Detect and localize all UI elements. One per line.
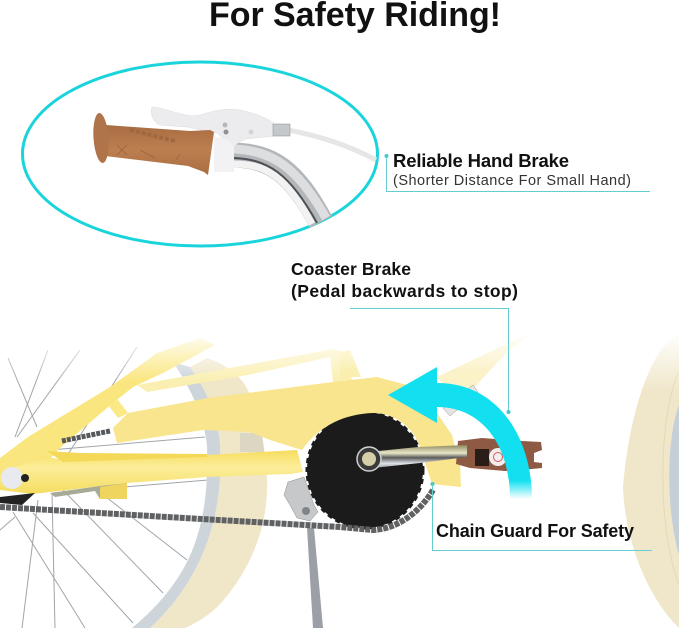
rear rim	[132, 362, 220, 628]
label: reliable hand brake	[384, 150, 650, 192]
label: chain guard: Chain Guard For Safety	[436, 521, 634, 541]
fade overlays	[0, 330, 340, 382]
cable	[288, 130, 376, 160]
handlebar	[230, 149, 326, 224]
black chainwheel	[307, 412, 423, 528]
upper guard bar	[137, 349, 352, 392]
seat stay	[0, 338, 215, 478]
grip	[105, 125, 214, 175]
chain stay tube	[0, 450, 303, 494]
front tire	[623, 335, 679, 628]
chain guard	[113, 377, 461, 487]
rear tire	[150, 358, 267, 628]
tire shadow	[240, 433, 264, 452]
chain	[0, 490, 433, 530]
lower chain	[62, 431, 110, 441]
label: coaster brake	[291, 259, 518, 301]
brake arm	[50, 483, 127, 499]
stand bracket	[284, 477, 318, 521]
label: reliable hand brake: Reliable Hand Brake	[393, 150, 569, 171]
photo: bicycle rear drivetrain	[0, 330, 679, 628]
brake lever	[151, 107, 275, 148]
clamp	[214, 136, 234, 172]
bottle bracket	[443, 385, 478, 416]
label: chain guard	[430, 482, 652, 550]
callout line: coaster brake	[350, 308, 510, 414]
adjuster	[273, 124, 290, 136]
crank arm	[368, 445, 467, 468]
arrow: pedal backwards	[388, 367, 532, 499]
spokes	[0, 347, 208, 628]
axle hub	[1, 467, 23, 489]
kickstand	[307, 528, 323, 628]
label: reliable hand brake: (Shorter Distance For Small Hand)	[393, 173, 631, 189]
front tube	[437, 330, 535, 395]
pedal	[456, 438, 542, 471]
label: coaster brake: Coaster Brake	[291, 259, 411, 279]
label: coaster brake: (Pedal backwards to stop)	[291, 281, 518, 301]
ellipse frame	[22, 62, 378, 246]
photo: hand brake in teal ellipse	[22, 62, 378, 246]
